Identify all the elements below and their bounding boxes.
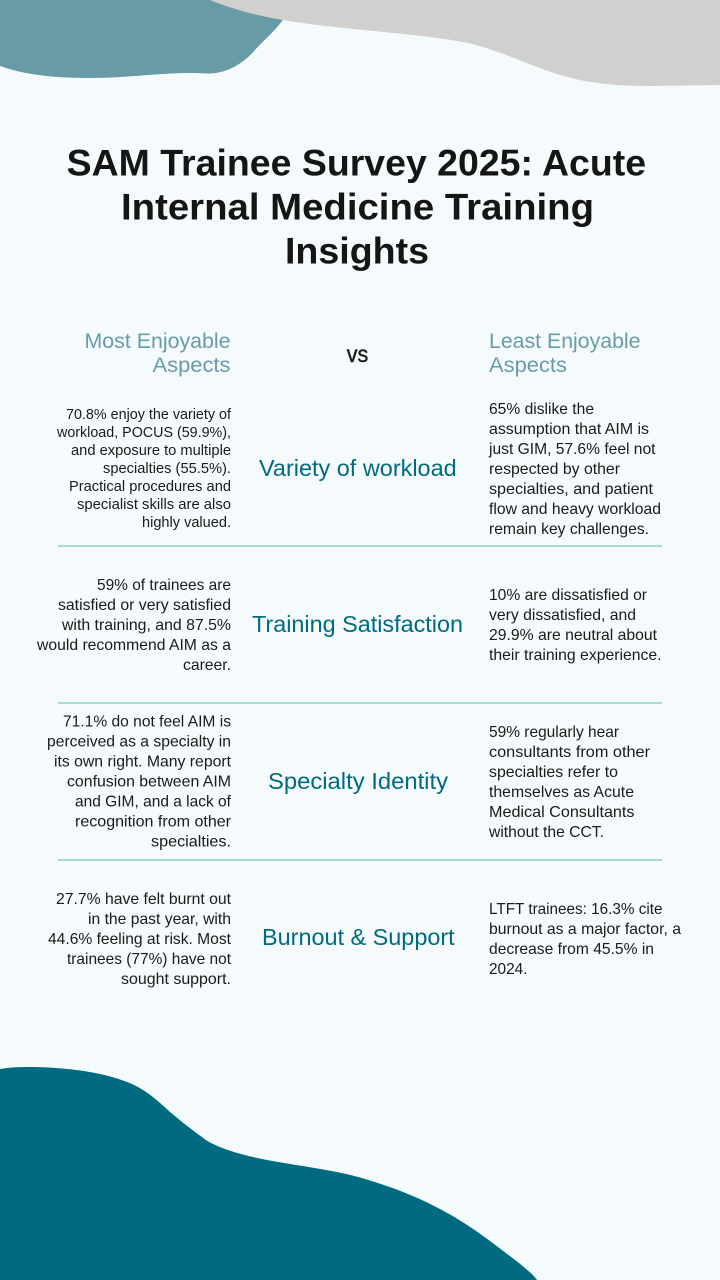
row 2 left text: career.	[183, 657, 231, 674]
row 1 left text	[56, 407, 232, 531]
row 4 left text: 27.7% have felt burnt out	[56, 891, 232, 908]
row 4 left text: in the past year, with	[88, 911, 231, 928]
row 3 left text: specialties.	[151, 834, 231, 850]
row 4 right text: decrease from 45.5% in	[489, 941, 654, 958]
row 2 left text: 59% of trainees are	[97, 577, 231, 594]
row 4 right text: burnout as a major factor, a	[489, 921, 681, 938]
row 2 right text: 29.9% are neutral about	[489, 627, 658, 644]
row 3 left text: confusion between AIM	[67, 774, 231, 790]
row 3 left text	[47, 714, 232, 850]
row 3 left text: 71.1% do not feel AIM is	[63, 714, 231, 730]
heading: most enjoyable aspects: Most Enjoyable	[84, 329, 230, 353]
row 1 left text: workload, POCUS (59.9%),	[56, 425, 231, 441]
row 1 right text: assumption that AIM is	[489, 421, 649, 438]
row 2 right text: their training experience.	[489, 647, 662, 664]
title: Insights	[285, 230, 429, 272]
row 1 left text: specialist skills are also	[77, 497, 231, 513]
row 1 right text: 65% dislike the	[489, 401, 594, 418]
background shape: top teal blob	[0, 0, 300, 78]
background shape: top grey blob	[210, 0, 720, 86]
row 1 left text: specialties (55.5%).	[103, 461, 231, 477]
row 1 left text: Practical procedures and	[69, 479, 231, 495]
row 4 right text: 2024.	[489, 961, 528, 978]
row 1 left text: and exposure to multiple	[71, 443, 231, 459]
heading: least enjoyable aspects: Least Enjoyable	[489, 329, 640, 353]
heading: least enjoyable aspects	[489, 329, 640, 377]
heading: least enjoyable aspects: Aspects	[489, 353, 567, 377]
row 2 right text: very dissatisfied, and	[489, 607, 636, 624]
row 3 right text	[488, 724, 650, 841]
row 4 right text: LTFT trainees: 16.3% cite	[489, 901, 663, 918]
row 4 left text: trainees (77%) have not	[67, 951, 232, 968]
row 1 left text: 70.8% enjoy the variety of	[66, 407, 232, 423]
heading: most enjoyable aspects	[84, 329, 230, 377]
row 3 left text: recognition from other	[75, 814, 231, 830]
row 2 right text: 10% are dissatisfied or	[489, 587, 647, 604]
row 3 right text: consultants from other	[489, 744, 650, 761]
row 2 heading: Training Satisfaction	[252, 611, 463, 637]
row 4 heading: Burnout & Support	[262, 924, 455, 950]
row 3 right text: specialties refer to	[489, 764, 618, 781]
row 1 heading: Variety of workload	[259, 455, 457, 481]
row 2 left text: satisfied or very satisfied	[58, 597, 231, 614]
heading: most enjoyable aspects: Aspects	[152, 353, 230, 377]
row 2 right text	[489, 587, 662, 664]
row 1 left text: highly valued.	[142, 515, 231, 531]
title: Internal Medicine Training	[121, 186, 594, 228]
row 3 right text: without the CCT.	[488, 824, 604, 841]
row 1 right text: respected by other	[489, 461, 620, 478]
row 3 left text: and GIM, and a lack of	[75, 794, 232, 810]
row 3 left text: perceived as a specialty in	[47, 734, 231, 750]
row 3 right text: Medical Consultants	[489, 804, 635, 821]
row 1 right text	[488, 401, 661, 538]
row 4 left text: sought support.	[121, 971, 231, 988]
row 3 left text: its own right. Many report	[54, 754, 232, 770]
row 2 left text	[36, 577, 231, 674]
row 4 left text: 44.6% feeling at risk. Most	[48, 931, 232, 948]
row 1 right text: just GIM, 57.6% feel not	[488, 441, 656, 458]
row 1 right text: remain key challenges.	[489, 521, 649, 538]
row 3 heading: Specialty Identity	[268, 768, 448, 794]
row 4 left text	[48, 891, 232, 988]
row 3 right text: themselves as Acute	[489, 784, 634, 801]
row 2 left text: would recommend AIM as a	[36, 637, 231, 654]
row 1 right text: flow and heavy workload	[489, 501, 661, 518]
row 1 right text: specialties, and patient	[489, 481, 654, 498]
vs label: vs	[347, 341, 368, 367]
title	[67, 142, 646, 272]
row 3 right text: 59% regularly hear	[489, 724, 619, 741]
background shape: bottom teal blob	[0, 1067, 537, 1280]
title: SAM Trainee Survey 2025: Acute	[67, 142, 646, 184]
row 4 right text	[489, 901, 681, 978]
row 2 left text: with training, and 87.5%	[61, 617, 231, 634]
